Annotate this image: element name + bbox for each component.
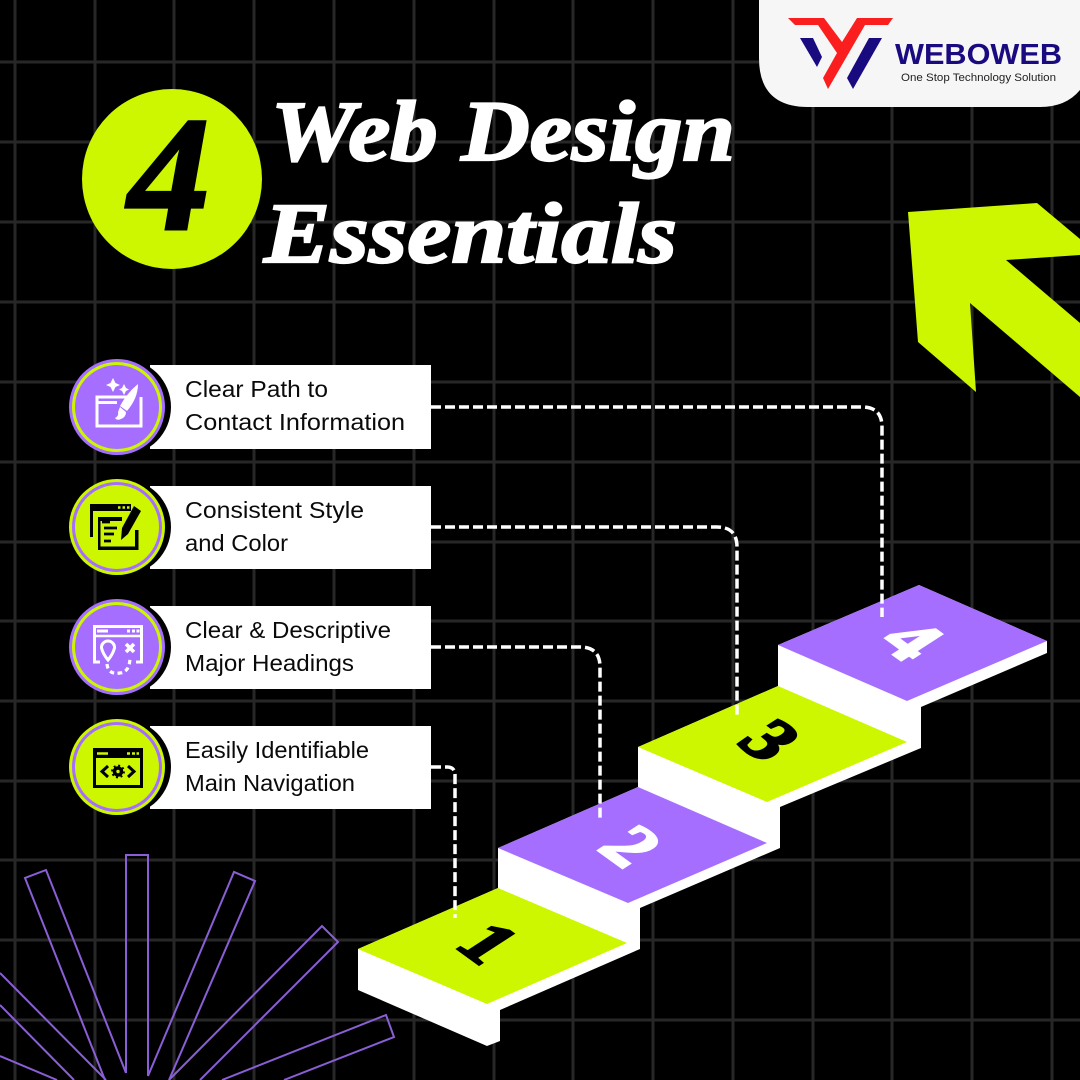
item 3 [69, 599, 431, 695]
logo panel [759, 0, 1080, 107]
icon: window with brush [97, 378, 141, 426]
step 1 [358, 888, 627, 1004]
title [263, 83, 735, 281]
number badge [82, 85, 262, 269]
label: and Color [185, 530, 288, 556]
item 4 [69, 719, 431, 815]
label [185, 617, 391, 676]
item 2 [69, 479, 431, 575]
step 4: 4 [864, 608, 960, 672]
label: Major Headings [185, 650, 354, 676]
icon: windows with pen [90, 504, 141, 550]
logo mark [788, 18, 893, 89]
arrow [908, 203, 1080, 397]
logo tagline: One Stop Technology Solution [901, 72, 1056, 84]
label: Consistent Style [185, 497, 364, 523]
step 2: 2 [583, 814, 679, 878]
logo name: WEBOWEB [895, 39, 1062, 71]
step 3 [638, 686, 907, 802]
item 1 [69, 359, 431, 455]
step 4 [778, 585, 1047, 701]
step 2 [498, 787, 767, 903]
label [185, 497, 364, 556]
icon: code window [94, 749, 142, 786]
label: Clear Path to [185, 376, 328, 402]
label [185, 737, 369, 796]
label: Main Navigation [185, 770, 355, 796]
staircase [358, 585, 1047, 1046]
label: Contact Information [185, 409, 405, 435]
decorative burst [0, 855, 394, 1080]
dashed connectors [431, 407, 882, 918]
label: Clear & Descriptive [185, 617, 391, 643]
step 1: 1 [440, 911, 536, 975]
step 3: 3 [722, 708, 818, 772]
number badge: 4 [125, 85, 210, 265]
title: Essentials [263, 185, 677, 281]
label: Easily Identifiable [185, 737, 369, 763]
icon: window with map route [94, 626, 142, 673]
title: Web Design [271, 83, 735, 179]
label [185, 376, 405, 435]
